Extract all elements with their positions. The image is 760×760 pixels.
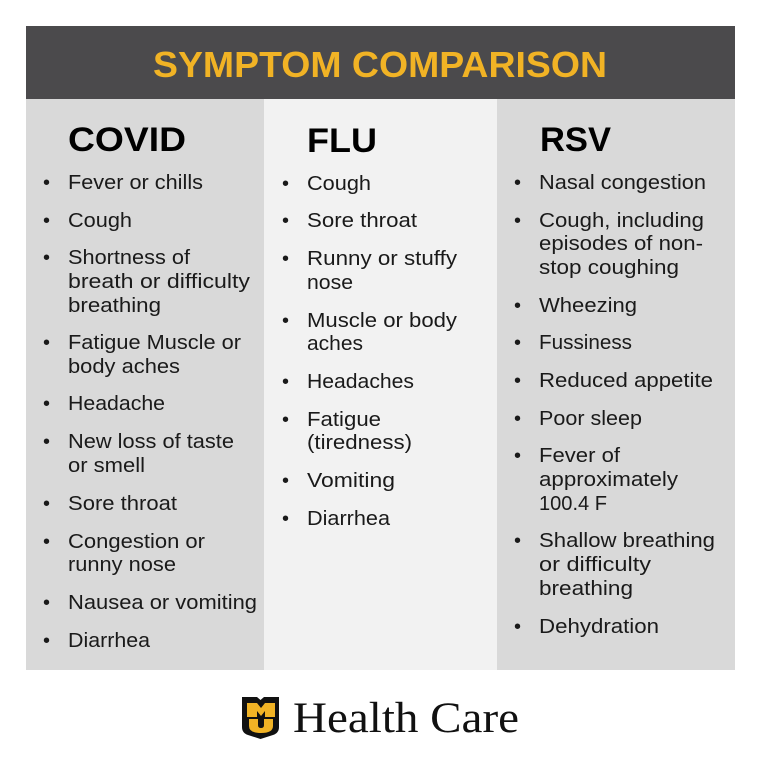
symptom list: COVID: • — [43, 531, 50, 553]
heading: RSV: RSV — [540, 121, 611, 159]
symptom list: RSV: stop coughing — [539, 257, 679, 279]
symptom list: COVID: Headache — [68, 393, 165, 415]
symptom list: COVID: breathing — [68, 295, 161, 317]
symptom list: COVID: Diarrhea — [68, 630, 151, 652]
symptom list: COVID: Sore throat — [68, 493, 177, 515]
symptom list: FLU: Headaches — [307, 371, 414, 393]
symptom list: RSV: approximately — [539, 469, 678, 491]
symptom list: RSV: Nasal congestion — [539, 172, 706, 194]
panel: RSV — [497, 99, 735, 670]
symptom list: RSV: 100.4 F — [539, 493, 607, 515]
symptom list: COVID: • — [43, 172, 50, 194]
symptom list: COVID: Cough — [68, 210, 132, 232]
symptom list: FLU: • — [282, 310, 289, 332]
title banner — [26, 26, 735, 99]
symptom list: FLU: Cough — [307, 173, 371, 195]
symptom list: RSV: • — [514, 445, 521, 467]
symptom list: COVID: • — [43, 493, 50, 515]
logo: MU Health Care — [242, 695, 519, 742]
symptom list: RSV: • — [514, 408, 521, 430]
symptom list: FLU — [282, 173, 457, 530]
symptom list: FLU: Diarrhea — [307, 508, 391, 530]
symptom list: COVID: • — [43, 210, 50, 232]
symptom list: RSV: • — [514, 172, 521, 194]
symptom list: FLU: (tiredness) — [307, 432, 412, 454]
symptom list: COVID: Shortness of — [68, 247, 190, 269]
heading: FLU: FLU — [307, 122, 377, 160]
symptom list: FLU: aches — [307, 333, 363, 355]
symptom list: RSV: or difficulty — [539, 554, 651, 576]
title: SYMPTOM COMPARISON — [153, 44, 607, 85]
symptom list: FLU: • — [282, 470, 289, 492]
symptom list: FLU: Sore throat — [307, 210, 417, 232]
symptom list: COVID: • — [43, 431, 50, 453]
symptom list: RSV: • — [514, 370, 521, 392]
symptom list: RSV — [514, 172, 715, 638]
symptom list: COVID: • — [43, 332, 50, 354]
symptom list: RSV: episodes of non- — [539, 233, 703, 255]
panel: COVID — [26, 99, 264, 670]
symptom list: COVID — [43, 172, 257, 652]
symptom list: FLU: Runny or stuffy — [307, 248, 457, 270]
symptom list: FLU: Muscle or body — [307, 310, 457, 332]
symptom list: RSV: • — [514, 332, 521, 354]
symptom list: COVID: breath or difficulty — [68, 271, 250, 293]
symptom list: COVID: • — [43, 247, 50, 269]
symptom list: COVID: or smell — [68, 455, 145, 477]
symptom list: COVID: Fever or chills — [68, 172, 203, 194]
symptom list: COVID: body aches — [68, 356, 180, 378]
symptom list: RSV: Dehydration — [539, 616, 659, 638]
symptom list: RSV: Poor sleep — [539, 408, 642, 430]
symptom list: RSV: • — [514, 616, 521, 638]
symptom list: RSV: • — [514, 295, 521, 317]
symptom list: FLU: • — [282, 173, 289, 195]
wordmark: Health Care — [293, 695, 519, 742]
symptom list: COVID: • — [43, 393, 50, 415]
symptom list: COVID: Congestion or — [68, 531, 205, 553]
icon: MU shield — [242, 697, 279, 739]
symptom list: RSV: • — [514, 530, 521, 552]
symptom list: RSV: Cough, including — [539, 210, 704, 232]
symptom list: FLU: Vomiting — [307, 470, 395, 492]
symptom list: RSV: Reduced appetite — [539, 370, 713, 392]
panel: FLU — [264, 99, 497, 670]
symptom list: FLU: Fatigue — [307, 409, 381, 431]
symptom list: COVID: Fatigue Muscle or — [68, 332, 241, 354]
symptom list: COVID: Nausea or vomiting — [68, 592, 257, 614]
symptom list: FLU: • — [282, 248, 289, 270]
symptom list: RSV: • — [514, 210, 521, 232]
symptom list: COVID: runny nose — [68, 554, 176, 576]
symptom list: RSV: Shallow breathing — [539, 530, 715, 552]
symptom list: FLU: • — [282, 210, 289, 232]
heading: COVID: COVID — [68, 121, 186, 159]
symptom list: RSV: Wheezing — [539, 295, 637, 317]
symptom list: FLU: • — [282, 409, 289, 431]
symptom list: FLU: • — [282, 371, 289, 393]
symptom list: COVID: New loss of taste — [68, 431, 234, 453]
symptom list: FLU: • — [282, 508, 289, 530]
symptom list: COVID: • — [43, 592, 50, 614]
symptom list: RSV: Fever of — [539, 445, 620, 467]
symptom list: RSV: Fussiness — [539, 332, 632, 354]
symptom list: FLU: nose — [307, 272, 353, 294]
symptom list: COVID: • — [43, 630, 50, 652]
symptom list: RSV: breathing — [539, 578, 633, 600]
